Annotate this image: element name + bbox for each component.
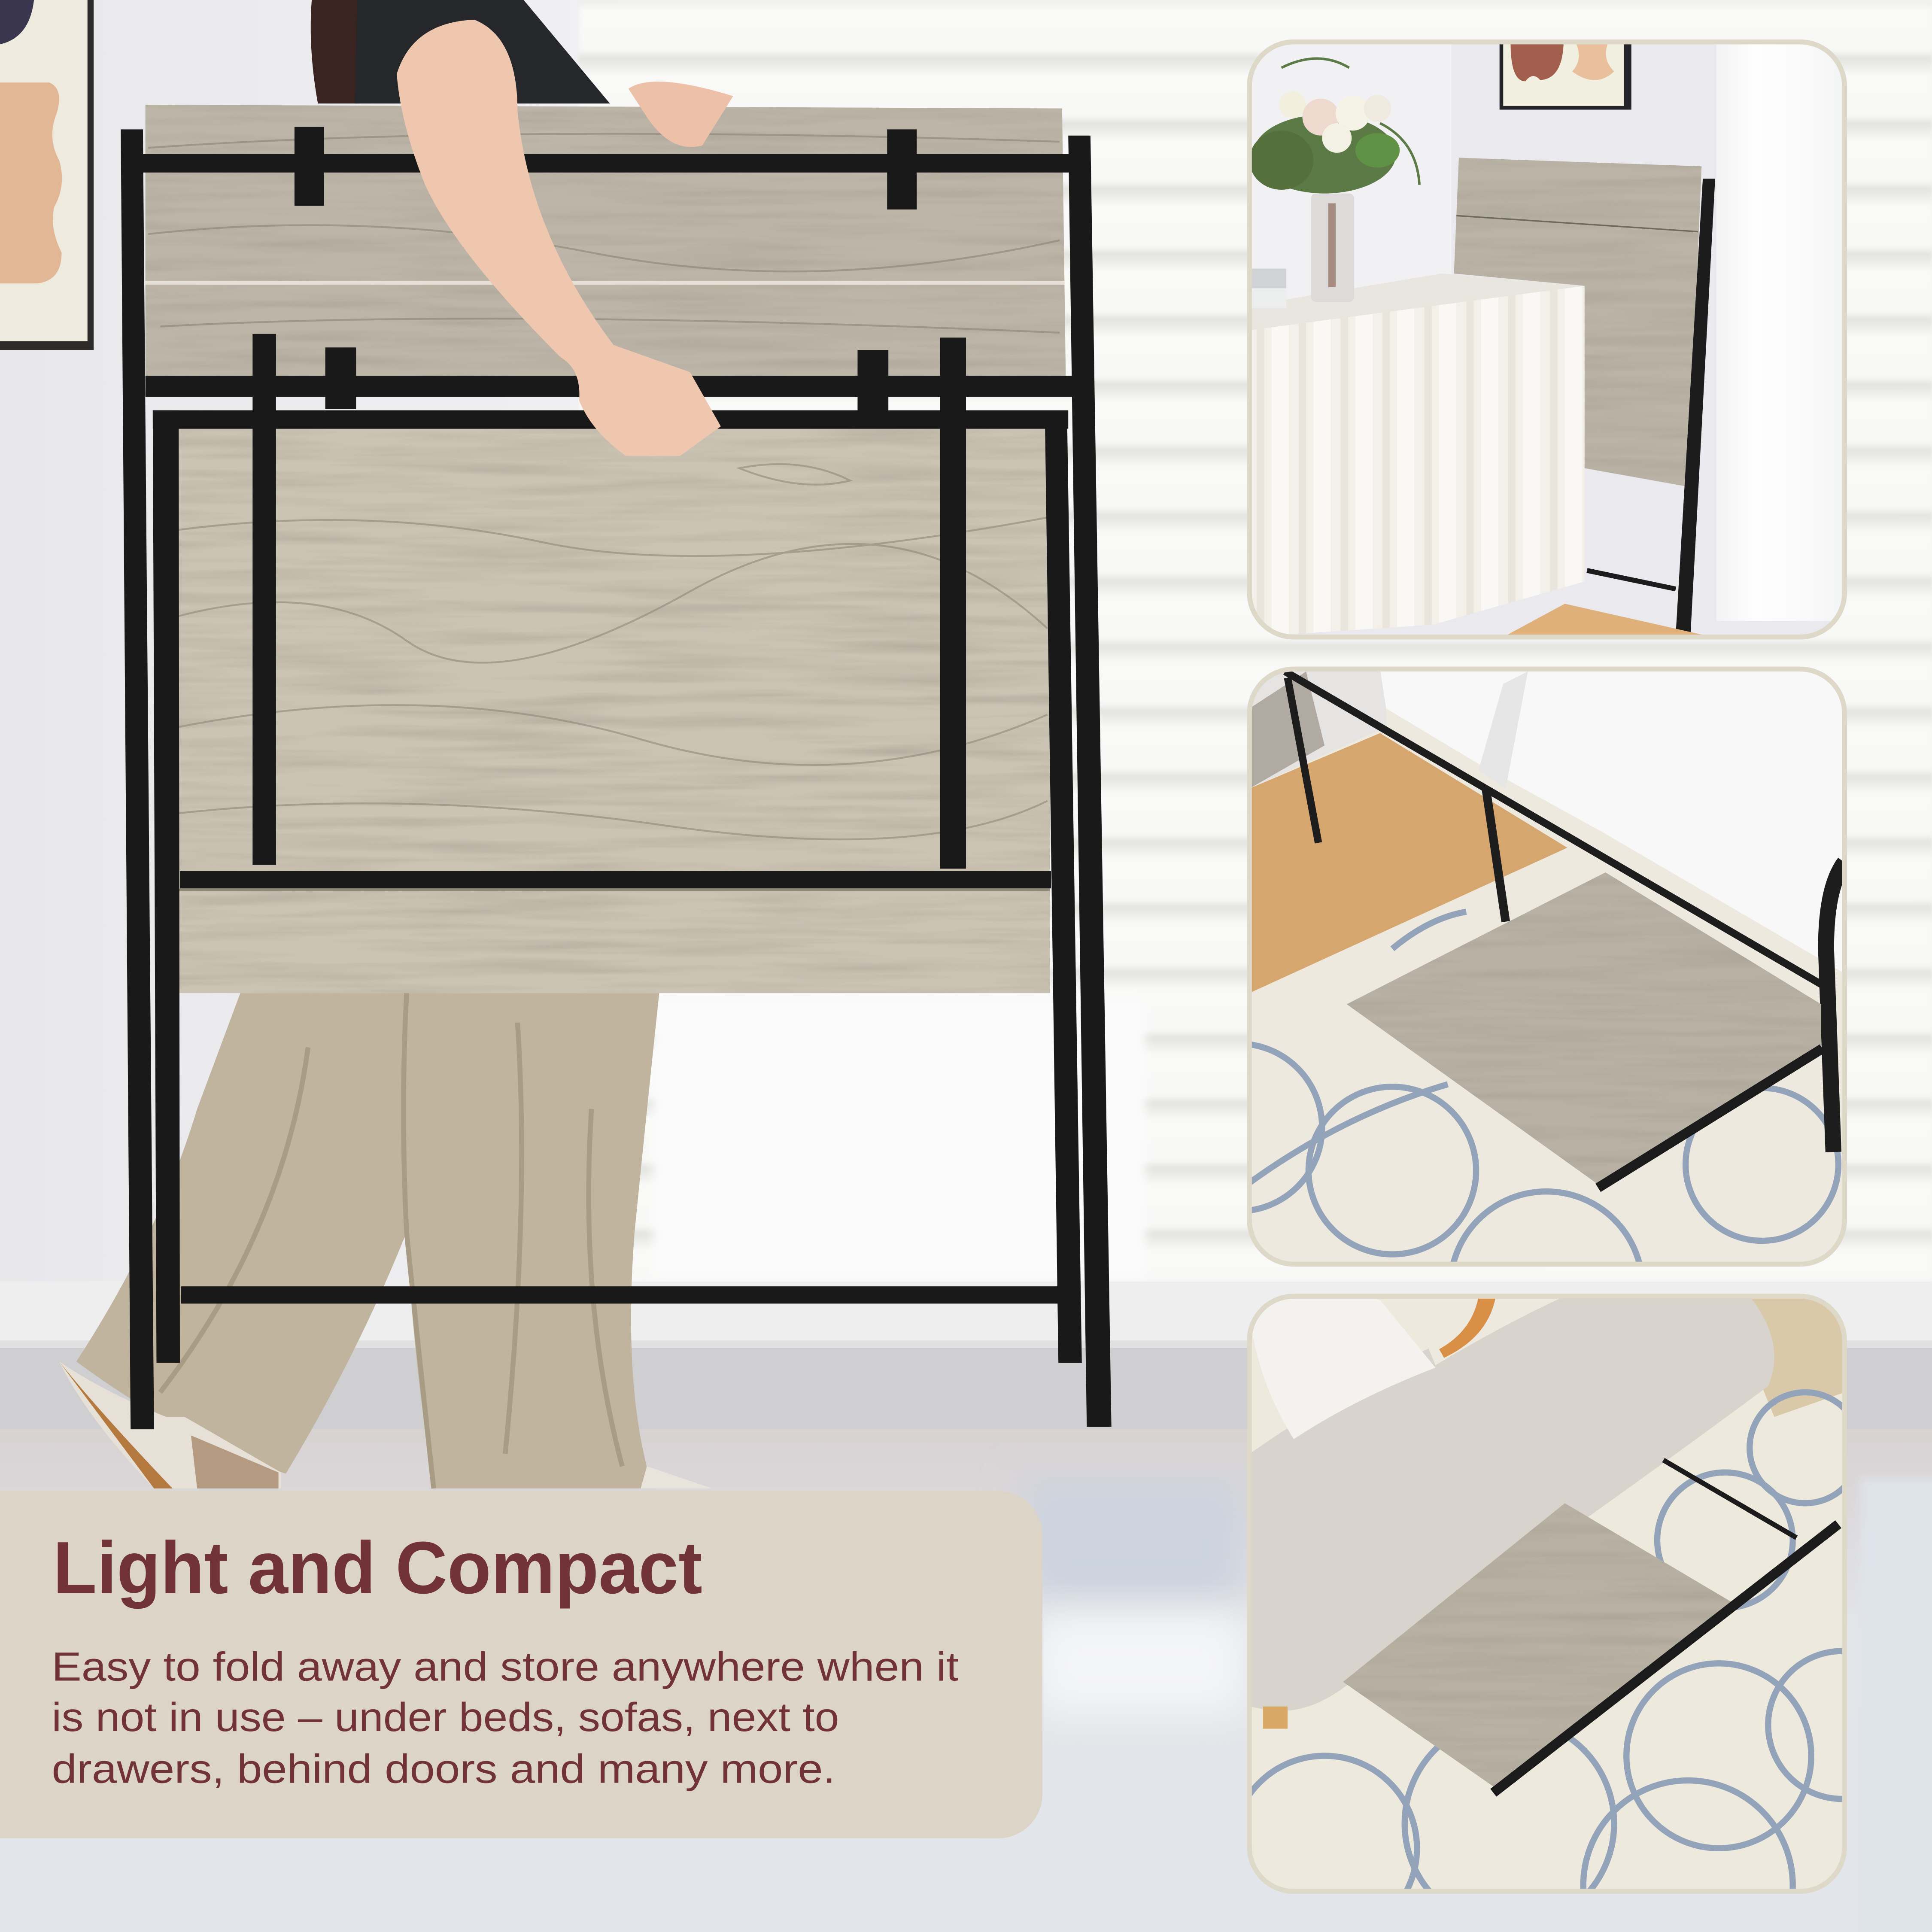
wood floor — [1249, 669, 1844, 1264]
cross bars — [142, 154, 1072, 173]
bed frame — [1285, 671, 1844, 1152]
rug pattern — [1154, 912, 1838, 1384]
trousers — [76, 993, 659, 1488]
body text: drawers, behind doors and many more. — [52, 1747, 835, 1792]
black folding frame — [121, 127, 1112, 1429]
floor — [1503, 604, 1713, 637]
inner legs — [153, 410, 180, 1363]
wall art — [0, 0, 94, 350]
lower wood table top — [179, 429, 1050, 993]
body text: Easy to fold away and store anywhere when it — [52, 1644, 959, 1690]
arm and hand — [397, 20, 733, 456]
hair — [311, 0, 370, 103]
pillows — [1249, 1293, 1435, 1439]
sofa — [1249, 1296, 1774, 1711]
folded table wood — [1454, 158, 1701, 487]
photo: table under sofa — [1232, 1293, 1916, 1932]
shirt — [355, 0, 610, 103]
photo: table under bed — [1154, 669, 1844, 1384]
upper wood table top — [146, 105, 1066, 382]
brackets — [295, 127, 324, 206]
wall corner — [1249, 669, 1386, 789]
person — [59, 0, 712, 1488]
books — [1249, 269, 1286, 289]
stowed table — [1347, 872, 1821, 1185]
text card — [0, 1491, 1042, 1838]
support straps — [252, 334, 276, 865]
vase — [1311, 194, 1354, 302]
heading: Light and Compact — [53, 1527, 702, 1609]
sofa foot — [1263, 1707, 1288, 1728]
rug pattern — [1232, 1392, 1916, 1932]
body text: is not in use – under beds, sofas, next to — [52, 1695, 839, 1740]
shoe — [59, 1361, 281, 1488]
body text — [52, 1644, 959, 1792]
bed — [1380, 669, 1844, 973]
stowed table — [1343, 1503, 1731, 1789]
table rails — [1493, 1524, 1838, 1793]
folded table leg — [1676, 179, 1715, 635]
table rail — [1598, 1048, 1823, 1188]
framed art — [1500, 43, 1631, 109]
cabinet — [1249, 273, 1585, 333]
photo: table next to cabinet — [1249, 42, 1844, 637]
flowers — [1249, 58, 1419, 194]
outer legs — [121, 129, 154, 1429]
curtain — [1716, 42, 1844, 621]
